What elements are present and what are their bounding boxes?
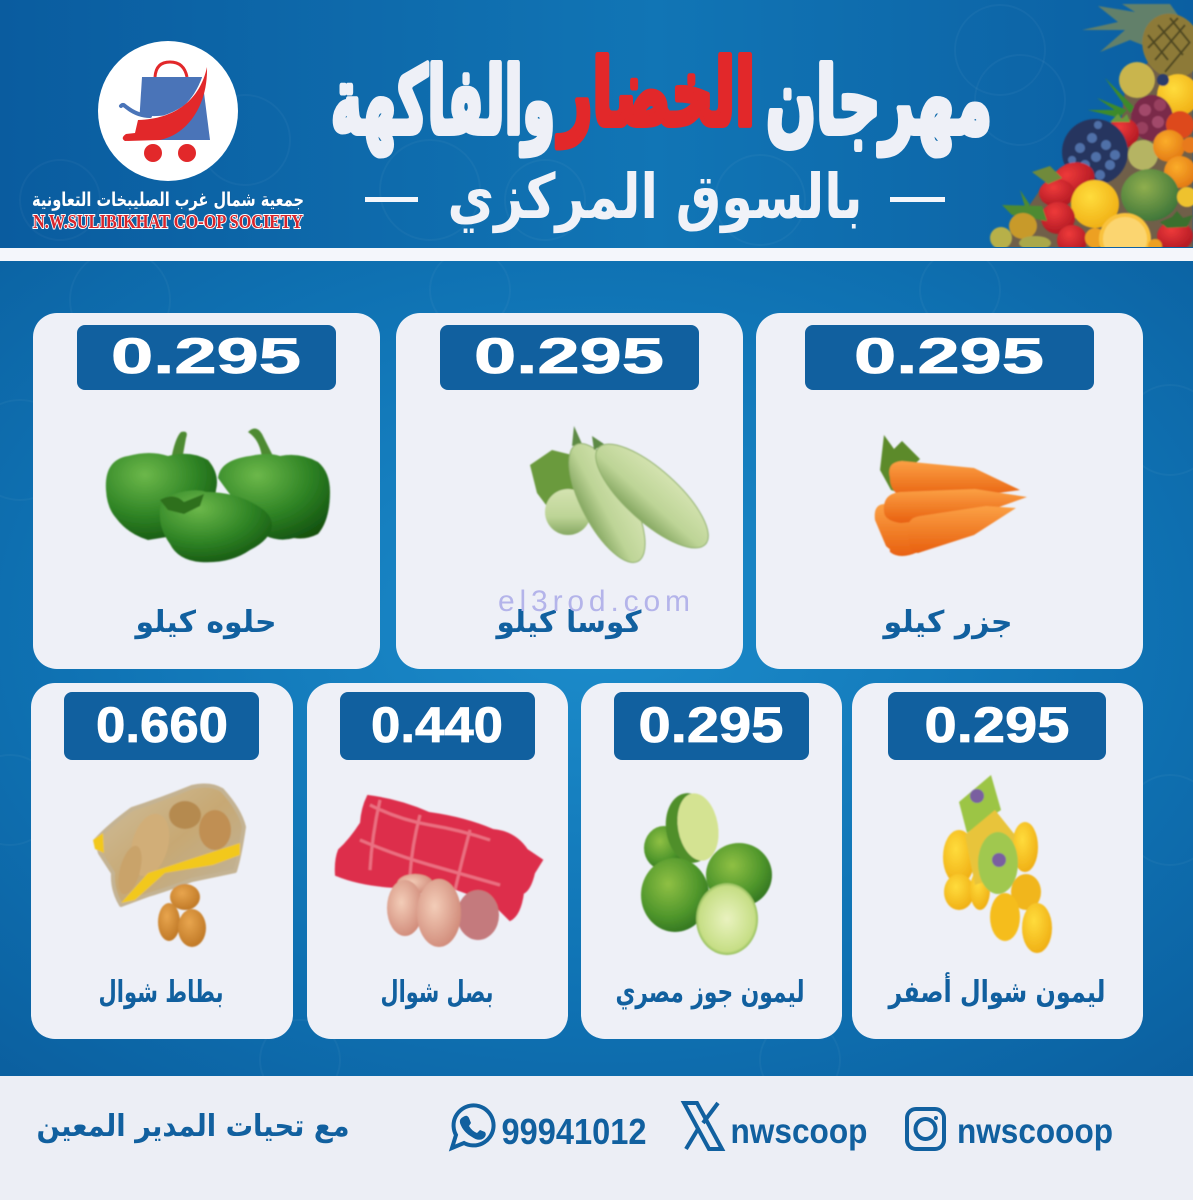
image: potatoes xyxy=(93,786,244,947)
icon: x xyxy=(684,1103,722,1149)
card: green lime xyxy=(581,683,842,1039)
price: carrots: 0.295 xyxy=(854,328,1044,384)
card: onions xyxy=(307,683,568,1039)
image: carrots xyxy=(875,435,1027,556)
price: green lime xyxy=(614,692,809,760)
title xyxy=(331,40,992,156)
image: lemons xyxy=(943,775,1052,953)
card: bell pepper xyxy=(33,313,380,669)
label: bell pepper: حلوه كيلو xyxy=(134,605,276,640)
page background xyxy=(0,260,1193,1076)
label: carrots: جزر كيلو xyxy=(881,605,1012,640)
card: carrots xyxy=(756,313,1143,669)
price: potatoes xyxy=(64,692,259,760)
white divider bar xyxy=(0,248,1193,261)
footer greeting: مع تحيات المدير المعين xyxy=(36,1109,350,1144)
logo arabic name: جمعية شمال غرب الصليبخات التعاونية xyxy=(32,189,304,211)
card: zucchini xyxy=(396,313,743,669)
watermark: el3rod.com xyxy=(498,585,690,618)
instagram handle: nwscooop xyxy=(957,1112,1113,1151)
price: yellow lemon: 0.295 xyxy=(924,697,1070,753)
image: limes xyxy=(641,790,772,955)
logo english name: N.W.SULIBIKHAT CO-OP SOCIETY xyxy=(33,211,303,233)
price: potatoes: 0.660 xyxy=(96,697,228,753)
price: carrots xyxy=(805,325,1094,390)
label: zucchini: كوسا كيلو xyxy=(495,605,642,640)
phone number: 99941012 xyxy=(502,1111,646,1152)
price: yellow lemon xyxy=(888,692,1106,760)
image: onions xyxy=(336,796,542,947)
logo badge xyxy=(98,41,238,181)
image: green peppers xyxy=(106,428,330,562)
icon: instagram xyxy=(907,1109,944,1149)
card: yellow lemon xyxy=(852,683,1143,1039)
label: potatoes: بطاط شوال xyxy=(98,975,224,1010)
pile base shadow xyxy=(1000,60,1193,248)
logo xyxy=(32,41,304,233)
title word 3: والفاكهة xyxy=(331,48,555,156)
label: green lime: ليمون جوز مصري xyxy=(616,975,804,1010)
pile of fruit xyxy=(990,62,1193,265)
title word 2 red: الخضار xyxy=(556,40,755,147)
price: onions xyxy=(340,692,535,760)
price: bell pepper xyxy=(77,325,336,390)
image: zucchini xyxy=(530,426,723,573)
price: zucchini: 0.295 xyxy=(474,328,664,384)
x handle: nwscoop xyxy=(730,1112,868,1151)
subtitle: بالسوق المركزي xyxy=(448,160,862,233)
header band xyxy=(0,0,1193,248)
card: potatoes xyxy=(31,683,293,1039)
label: yellow lemon: ليمون شوال أصفر xyxy=(887,972,1106,1010)
price: zucchini xyxy=(440,325,699,390)
pineapple xyxy=(1083,3,1193,76)
label: onions: بصل شوال xyxy=(380,975,494,1010)
icon: whatsapp xyxy=(452,1105,494,1148)
title word 1: مهرجان xyxy=(766,48,992,156)
price: onions: 0.440 xyxy=(371,697,503,753)
fruit pile xyxy=(990,4,1193,265)
footer bar xyxy=(0,1076,1193,1200)
price: bell pepper: 0.295 xyxy=(111,328,301,384)
price: green lime: 0.295 xyxy=(638,697,784,753)
